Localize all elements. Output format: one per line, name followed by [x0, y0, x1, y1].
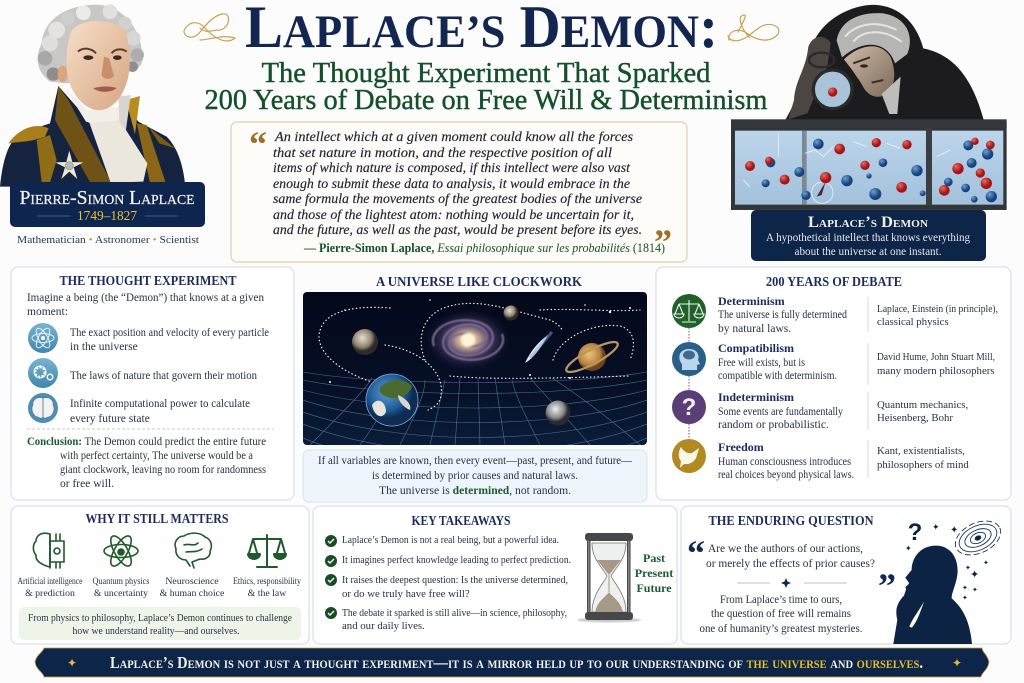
text: determinism: The universe is fully determined — [718, 309, 847, 321]
icon: brain — [28, 393, 58, 423]
heading: 200 YEARS OF DEBATE — [766, 275, 902, 290]
quotation: items of which nature is composed, if this intellect were also vast — [273, 160, 630, 175]
demon caption: Laplace’s Demon — [808, 214, 928, 231]
caption box: If all variables are known, then every event—past, present, and future— — [318, 455, 632, 467]
thinkers: compatibilism: many modern philosophers — [877, 365, 995, 377]
conclusion — [27, 436, 266, 490]
text: freedom: real choices beyond physical laws. — [718, 469, 854, 481]
question mark and galaxy doodle: ✦ — [970, 569, 979, 581]
text: indeterminism: Some events are fundamentally — [718, 406, 843, 418]
heading: THE ENDURING QUESTION — [708, 514, 874, 529]
panel: why it still matters — [11, 506, 309, 644]
text: indeterminism: random or probabilistic. — [718, 419, 829, 431]
heading: WHY IT STILL MATTERS — [86, 512, 229, 527]
heading: A UNIVERSE LIKE CLOCKWORK — [376, 275, 582, 290]
row: compatibilism — [672, 341, 995, 382]
bottom banner — [35, 648, 989, 677]
panel: the enduring question — [681, 506, 1011, 644]
caption box: The universe is determined, not random. — [379, 485, 571, 497]
particle tank — [731, 119, 1007, 210]
thinkers: compatibilism — [877, 351, 995, 377]
quotation: An intellect which at a given moment could know all the forces — [274, 129, 633, 144]
icon: dove — [672, 439, 706, 473]
item text: particles — [70, 327, 269, 353]
demon caption: about the universe at one instant. — [794, 246, 942, 258]
question text: Are we the authors of our actions, — [708, 541, 863, 555]
icon labels: & human choice — [160, 588, 225, 599]
panel: a universe like clockwork — [303, 275, 647, 502]
item text: laws: The laws of nature that govern their motion — [70, 370, 257, 382]
icon labels: Ethics, responsibility — [233, 576, 301, 587]
conclusion: Conclusion: The Demon could predict the entire future — [27, 436, 266, 448]
caption box — [303, 450, 647, 502]
flourish right — [728, 15, 779, 41]
quotation — [273, 129, 642, 237]
icon: scales — [672, 294, 706, 328]
question mark and galaxy doodle: ✦ — [972, 586, 978, 594]
subtitle — [204, 58, 768, 116]
illustration: the Demon with magnifying glass — [785, 5, 984, 121]
text: freedom: Freedom — [718, 440, 764, 454]
summary box: how we understand reality—and ourselves. — [72, 625, 240, 637]
summary box — [19, 607, 301, 640]
question mark and galaxy doodle: ✦ — [962, 594, 968, 602]
conclusion: with perfect certainty, The universe would be a — [60, 450, 253, 462]
checklist: It raises the deepest question: Is the universe determined, — [342, 574, 568, 586]
item text: particles: in the universe — [70, 341, 138, 353]
text: determinism: by natural laws. — [718, 323, 791, 335]
quotation: same formula the movements of the greatest bodies of the universe — [273, 191, 642, 206]
text: compatibilism — [718, 341, 837, 382]
heading: KEY TAKEAWAYS — [412, 514, 511, 529]
icon: head — [672, 342, 706, 376]
checklist: and our daily lives. — [342, 620, 425, 632]
intro text: Imagine a being (the “Demon”) that knows at a given — [27, 292, 264, 304]
time labels — [635, 551, 673, 595]
text: freedom — [718, 440, 854, 481]
subtitle: 200 Years of Debate on Free Will & Determinism — [204, 85, 768, 116]
icon: hourglass — [577, 533, 641, 622]
closing text: the question of free will remains — [711, 608, 851, 620]
roles line: Mathematician • Astronomer • Scientist — [17, 234, 199, 246]
thinkers: indeterminism: Quantum mechanics, — [877, 399, 968, 411]
closing text: From Laplace’s time to ours, — [720, 594, 842, 606]
name plate: Pierre-Simon Laplace — [20, 187, 194, 209]
attribution: — Pierre-Simon Laplace, Essai philosophique sur les probabilités (1814) — [303, 240, 665, 255]
icon: scales of justice — [248, 535, 286, 567]
time labels: Present — [635, 566, 673, 580]
item text: particles: The exact position and velocity of every particle — [70, 327, 269, 339]
thinkers: indeterminism — [877, 399, 968, 424]
quote panel — [231, 122, 687, 262]
demon caption: A hypothetical intellect that knows everything — [766, 232, 970, 244]
checklist: The debate it sparked is still alive—in science, philosophy, — [342, 607, 567, 619]
icon: gears — [28, 358, 58, 388]
checklist: or do we truly have free will? — [342, 588, 470, 600]
row: freedom — [672, 439, 969, 481]
illustration: cosmos with orbits and spacetime grid — [303, 292, 647, 445]
icon: AI brain and chip — [33, 533, 64, 568]
intro text: moment: — [27, 306, 68, 318]
question text — [706, 541, 875, 570]
text: compatibilism: compatible with determinism. — [718, 370, 837, 382]
subtitle: The Thought Experiment That Sparked — [262, 58, 710, 89]
question mark and galaxy doodle — [905, 514, 1006, 602]
thinkers: freedom: philosophers of mind — [877, 459, 969, 471]
checklist: It imagines perfect knowledge leading to perfect prediction. — [342, 554, 571, 566]
icon: brain — [175, 533, 211, 568]
text: indeterminism — [718, 390, 843, 431]
quotation: and those of the lightest atom: nothing would be uncertain for it, — [273, 207, 634, 222]
icon: atom — [28, 323, 58, 353]
icon labels: Neuroscience — [165, 576, 219, 587]
opening quote mark: “ — [687, 533, 705, 573]
bottom banner: ✦ — [952, 656, 962, 670]
summary box: From physics to philosophy, Laplace’s Demon continues to challenge — [28, 612, 292, 624]
thinkers: compatibilism: David Hume, John Stuart Mill, — [877, 351, 995, 363]
demon caption — [751, 210, 986, 261]
item text: computation: Infinite computational power to calculate — [70, 398, 250, 410]
panel: key takeaways — [313, 506, 677, 644]
icon: question mark: ? — [682, 394, 696, 421]
question mark and galaxy doodle: ✦ — [962, 584, 968, 592]
row: indeterminism — [672, 390, 968, 431]
thinkers: freedom: Kant, existentialists, — [877, 445, 965, 457]
panel: the thought experiment — [11, 267, 294, 500]
row: determinism — [672, 294, 998, 335]
bottom banner: Laplace’s Demon is not just a thought experiment—it is a mirror held up to our understanding of the universe and ourselves. — [110, 653, 923, 672]
name plate: 1749–1827 — [77, 208, 137, 223]
icon labels: & prediction — [25, 588, 75, 599]
text: compatibilism: Compatibilism — [718, 341, 794, 355]
text: freedom: Human consciousness introduces — [718, 456, 851, 468]
conclusion: or free will. — [60, 478, 114, 490]
item text: computation — [70, 398, 250, 425]
text: determinism — [718, 294, 847, 335]
checklist — [325, 534, 571, 632]
checklist: Laplace’s Demon is not a real being, but a powerful idea. — [342, 534, 559, 546]
icon labels: & the law — [248, 588, 287, 599]
conclusion: giant clockwork, leaving no room for randomness — [60, 464, 266, 476]
portrait: Pierre-Simon Laplace — [0, 4, 185, 187]
thinkers: freedom — [877, 445, 969, 471]
question mark and galaxy doodle: ✦ — [983, 559, 989, 567]
item text: computation: every future state — [70, 413, 150, 425]
thinkers: determinism — [877, 303, 998, 328]
text: determinism: Determinism — [718, 294, 785, 308]
question mark and galaxy doodle: ✦ — [950, 525, 958, 536]
closing quote mark: ” — [878, 566, 896, 606]
time labels: Past — [643, 551, 665, 565]
icon: question mark — [672, 390, 706, 424]
heading: THE THOUGHT EXPERIMENT — [60, 274, 237, 289]
flourish left — [184, 14, 235, 41]
closing text: one of humanity’s greatest mysteries. — [700, 623, 863, 635]
icon labels: & uncertainty — [94, 588, 148, 599]
caption box: is determined by prior causes and natural laws. — [372, 470, 578, 482]
closing quote mark: ” — [654, 222, 672, 262]
quotation: enough to submit these data to analysis, it would embrace in the — [273, 176, 630, 191]
text: indeterminism: Indeterminism — [718, 390, 794, 404]
text: compatibilism: Free will exists, but is — [718, 357, 805, 369]
panel: 200 years of debate — [656, 267, 1011, 500]
icon labels: Artificial intelligence — [18, 576, 83, 587]
thinkers: indeterminism: Heisenberg, Bohr — [877, 412, 953, 424]
opening quote mark: “ — [249, 124, 267, 164]
quotation: that set nature in motion, and the respective position of all — [273, 145, 612, 160]
question text: or merely the effects of prior causes? — [706, 556, 875, 570]
quotation: and the future, as well as the past, would be present before its eyes. — [273, 222, 642, 237]
thinkers: determinism: Laplace, Einstein (in principle), — [877, 303, 998, 315]
question mark and galaxy doodle: ✦ — [965, 564, 971, 572]
question mark and galaxy doodle: ✦ — [932, 522, 940, 532]
name plate — [10, 182, 205, 227]
icon labels: Quantum physics — [92, 576, 150, 587]
icon labels — [18, 576, 301, 599]
question mark and galaxy doodle: ✦ — [905, 544, 912, 553]
closing text — [700, 594, 863, 635]
icon: atom — [104, 533, 138, 569]
silhouette of a thinker — [893, 546, 972, 644]
bottom banner: ✦ — [67, 656, 77, 670]
intro text — [27, 292, 264, 318]
ornament divider — [737, 578, 847, 588]
question mark and galaxy doodle: ? — [908, 519, 922, 546]
thinkers: determinism: classical physics — [877, 316, 949, 328]
time labels: Future — [636, 581, 672, 595]
